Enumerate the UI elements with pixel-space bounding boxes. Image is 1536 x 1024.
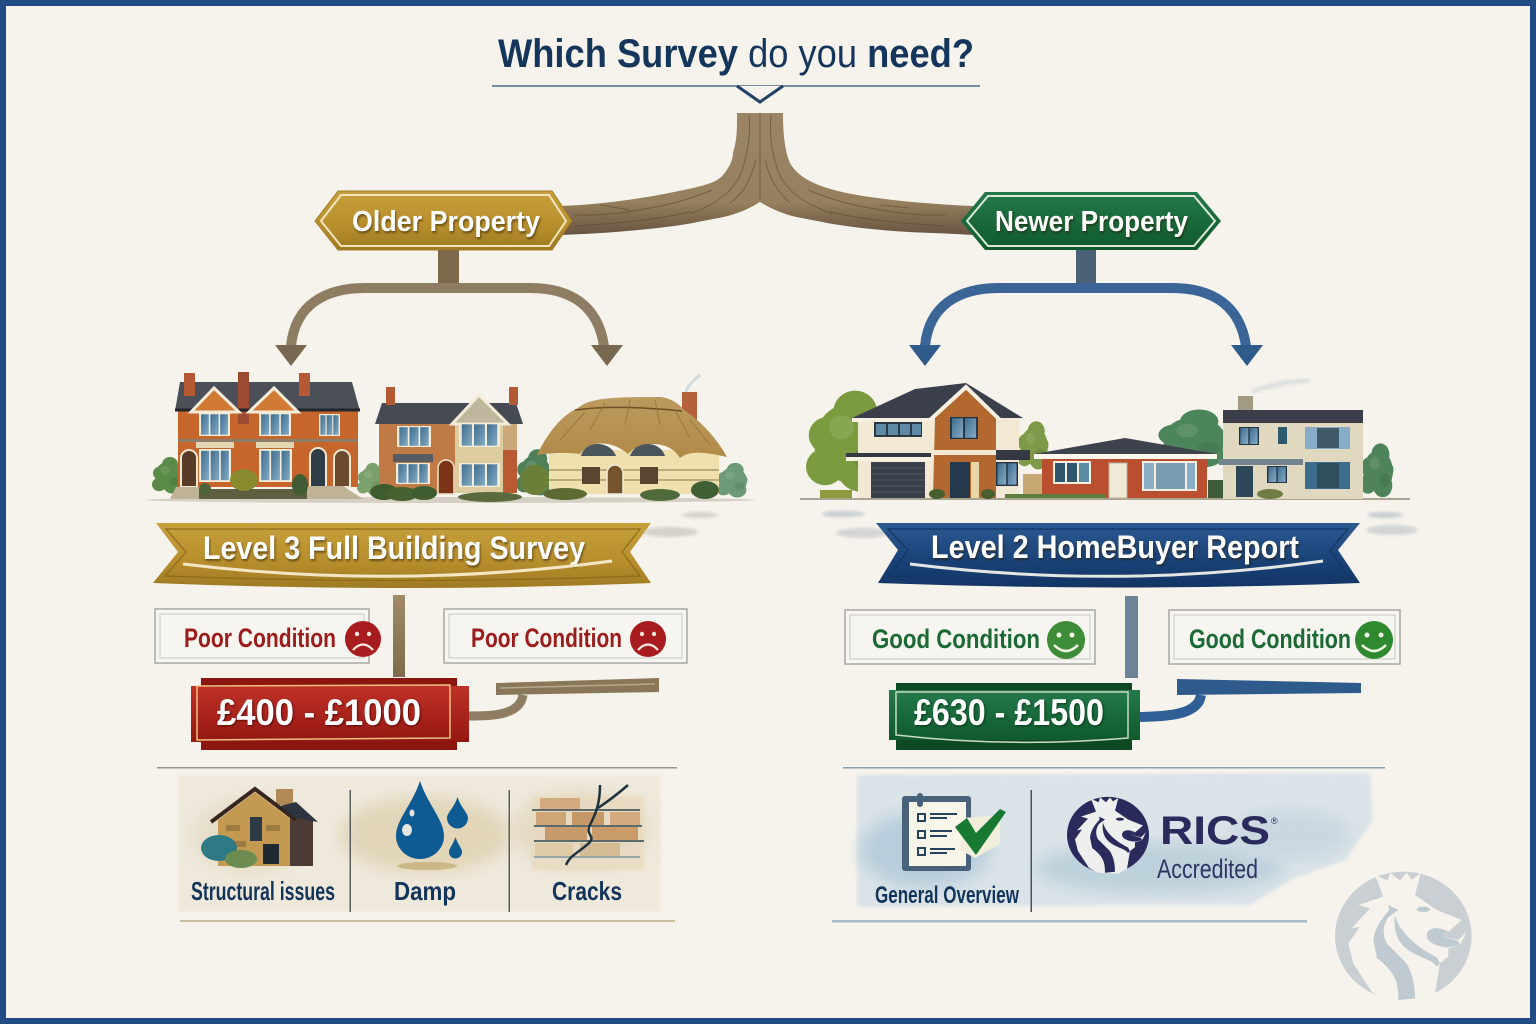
watermark: lion emblem [1335, 872, 1472, 1002]
price tag: £400 - £1000 [191, 678, 469, 750]
house: red brick semi-detached [170, 372, 363, 499]
price tag: £630 - £1500 [889, 683, 1140, 750]
ground shadow blobs [642, 511, 1418, 538]
house: thatched cottage [520, 375, 727, 501]
condition: Poor Condition (left) [155, 609, 381, 663]
houses: newer properties [800, 380, 1410, 500]
icon: water drops [396, 781, 468, 870]
condition: Poor Condition (right): Poor Condition [471, 623, 622, 653]
label: Cracks: Cracks [552, 876, 622, 906]
tree trunk branching to both property types [560, 113, 973, 235]
sign: Newer Property: Newer Property [995, 206, 1188, 238]
banner: Level 3 Full Building Survey: Level 3 Full Building Survey [203, 530, 585, 566]
arrow fork: older [275, 250, 623, 366]
price tag: £630 - £1500: £630 - £1500 [914, 692, 1104, 733]
sign: Older Property: Older Property [352, 206, 540, 238]
condition: Poor Condition (right) [444, 609, 687, 663]
label: Structural issues: Structural issues [191, 876, 335, 906]
panel: older property issues [157, 767, 677, 922]
condition: Good Condition (right) [1169, 610, 1400, 664]
icon: sad face [630, 621, 666, 657]
title underline with chevron [492, 86, 980, 102]
house: brick bay-window villa [370, 387, 523, 502]
icon: cracked brick wall [532, 785, 644, 870]
house: modern detached with garage [820, 383, 1043, 499]
sign: Newer Property [961, 192, 1221, 250]
condition: Good Condition (right): Good Condition [1189, 624, 1351, 654]
arrow fork: newer [909, 250, 1263, 366]
title: Which Survey do you need? [498, 32, 974, 76]
connector post: older [393, 595, 405, 677]
condition: Good Condition (left): Good Condition [872, 624, 1040, 654]
icon: smiley face [1047, 621, 1085, 659]
panel: newer property benefits [832, 767, 1385, 922]
connector: older price to side [469, 678, 659, 716]
sign: Older Property [315, 191, 572, 250]
condition: Poor Condition (left): Poor Condition [184, 623, 336, 653]
label: Accredited: Accredited [1157, 854, 1258, 884]
house: brick bungalow [1005, 438, 1228, 498]
connector: newer price to side [1140, 679, 1361, 717]
label: General Overview: General Overview [875, 882, 1019, 909]
houses: older properties [145, 372, 755, 503]
RICS wordmark: RICS [1160, 809, 1270, 853]
house: modern rendered two-storey [1219, 380, 1363, 499]
banner: Level 2 HomeBuyer Report: Level 2 HomeBuyer Report [931, 529, 1299, 565]
icon: checklist clipboard [902, 793, 1006, 871]
icon: damaged house [201, 789, 318, 868]
banner: Level 3 Full Building Survey [153, 523, 651, 588]
RICS logo lion [1067, 797, 1149, 874]
trees behind newer houses [800, 391, 1410, 500]
banner: Level 2 HomeBuyer Report [876, 523, 1360, 588]
condition: Good Condition (left) [845, 610, 1095, 664]
label: Damp: Damp [394, 876, 456, 906]
price tag: £400 - £1000: £400 - £1000 [217, 692, 421, 733]
connector post: newer [1125, 596, 1138, 678]
icon: sad face [345, 621, 381, 657]
registered mark: ® [1271, 816, 1278, 826]
icon: smiley face [1355, 621, 1393, 659]
ground shrubs behind older houses [145, 449, 755, 503]
